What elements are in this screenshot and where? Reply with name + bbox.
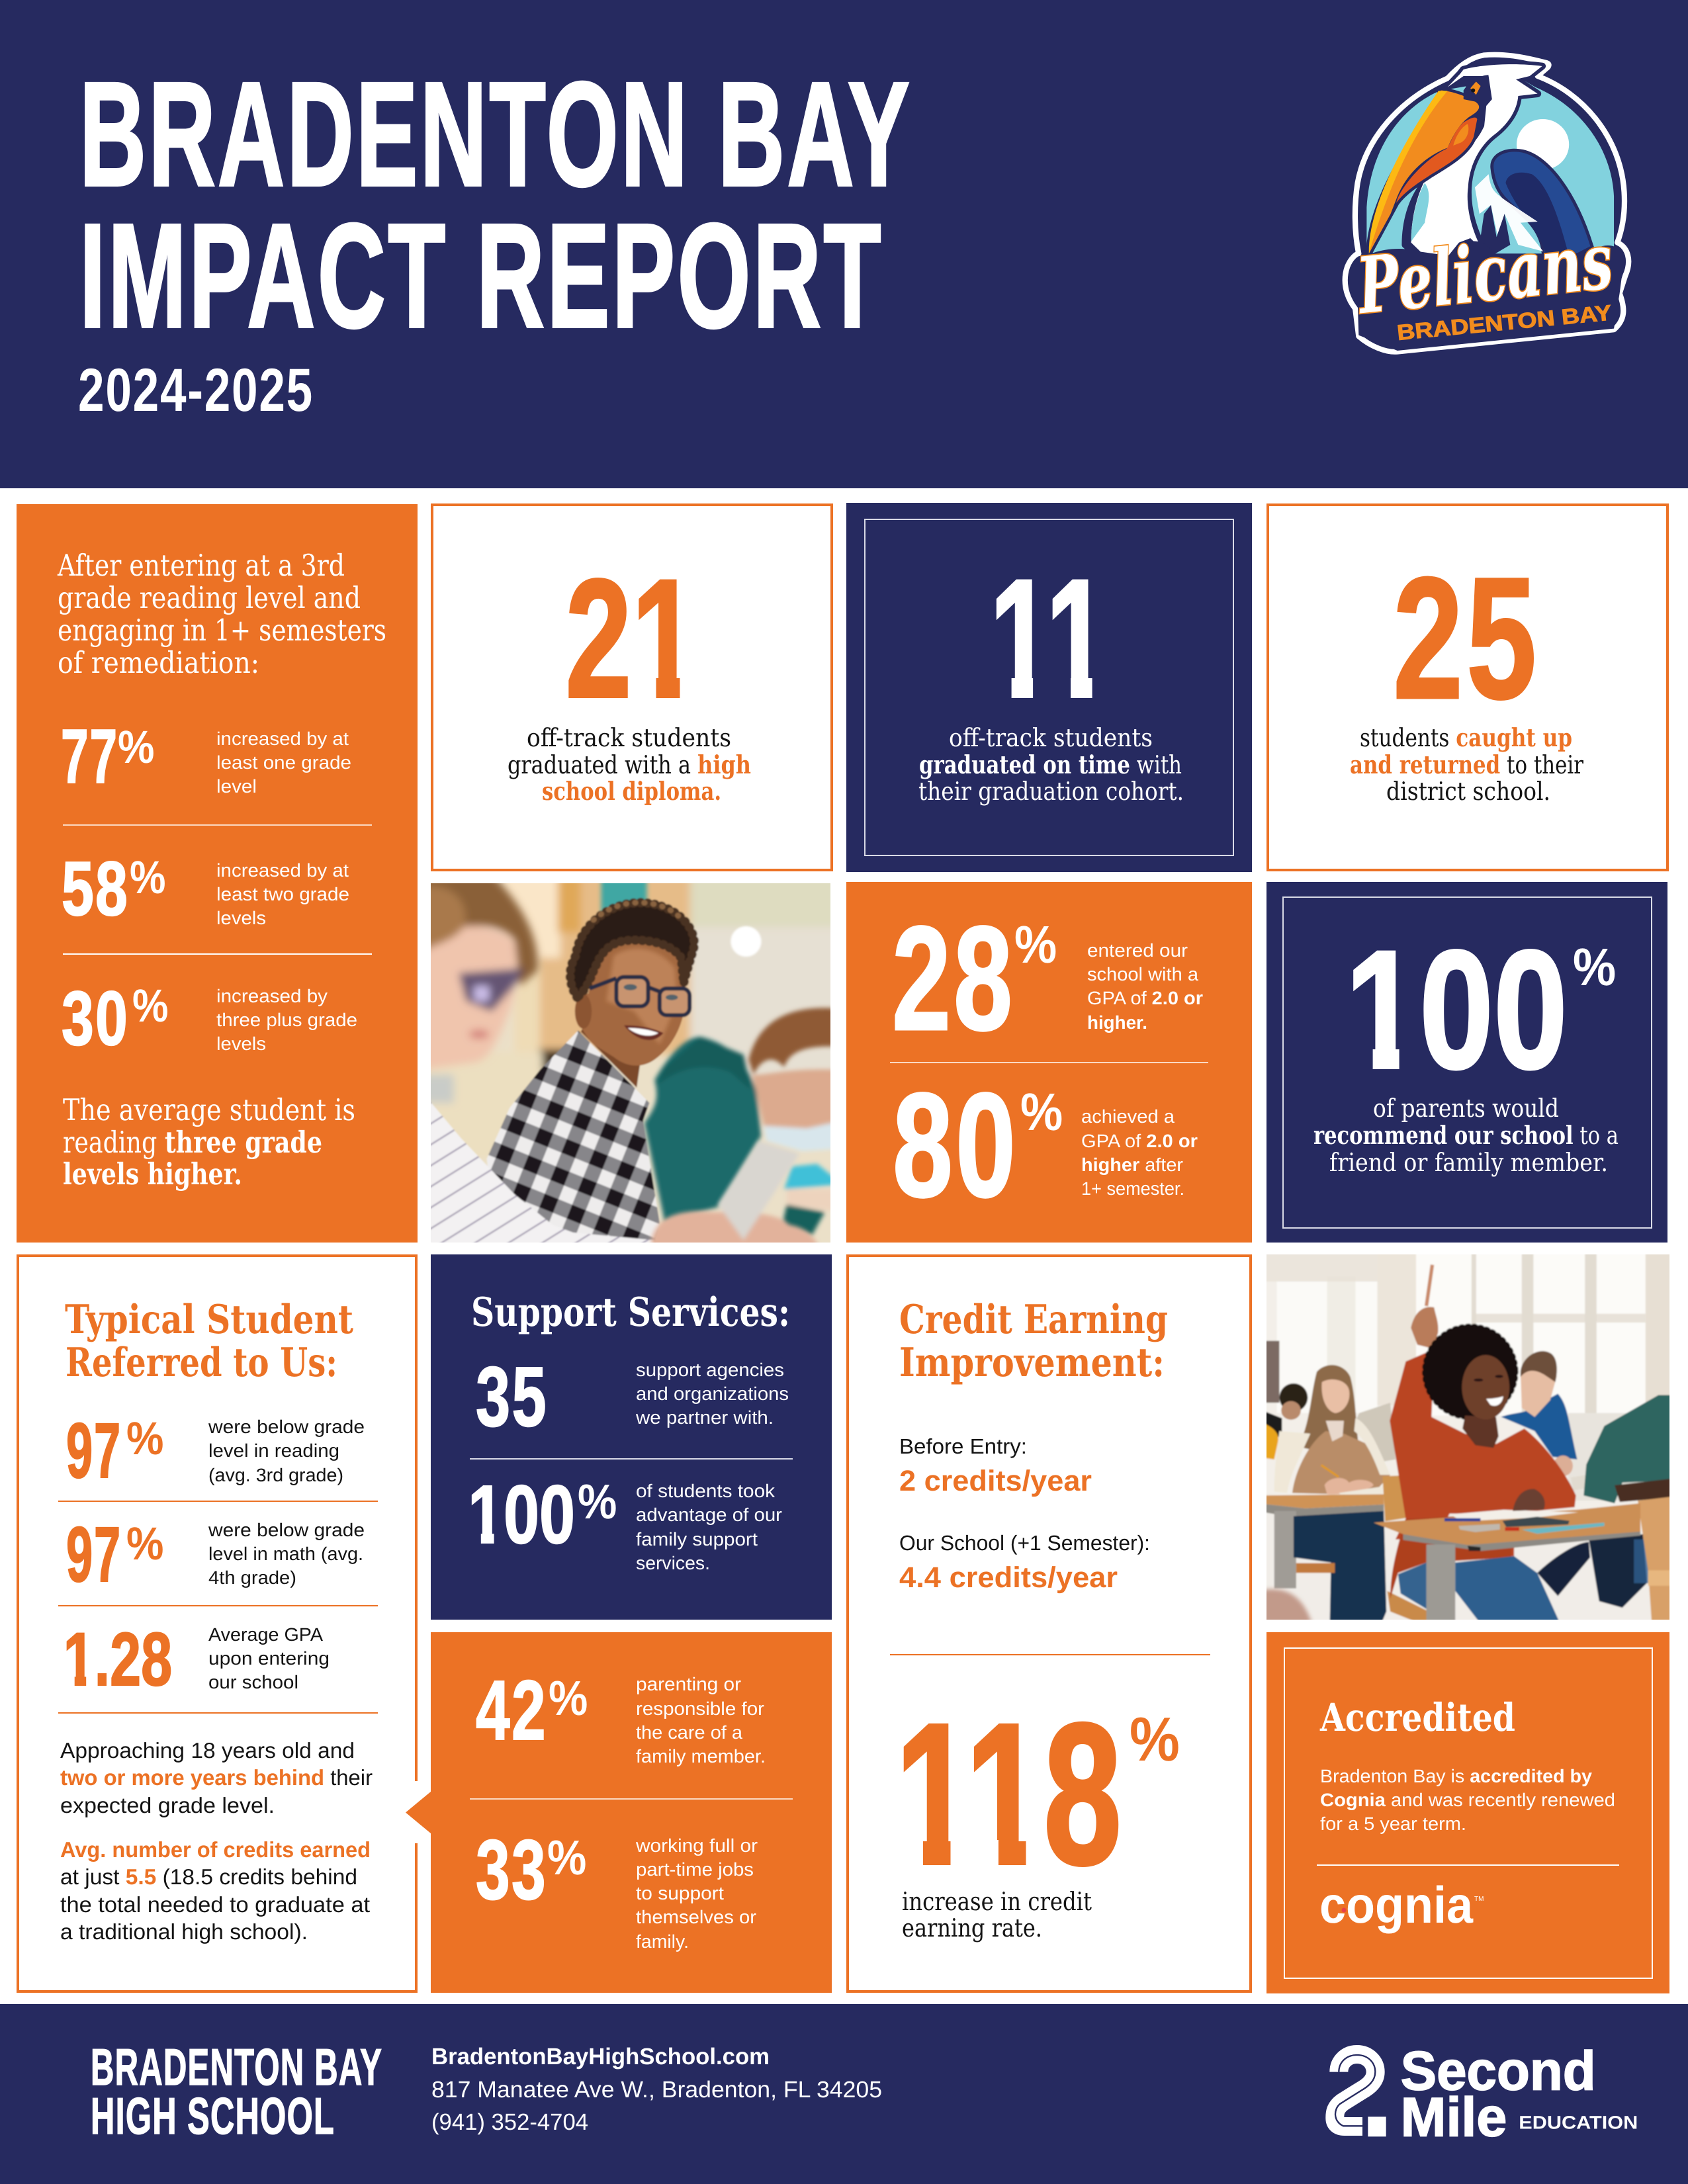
stat: 1.28 GPA: Average GPA	[208, 1624, 323, 1645]
striped shirt	[431, 1102, 655, 1243]
panel: parents recommend: of parents would	[1373, 1094, 1559, 1123]
stat: 42%: 42	[476, 1663, 547, 1758]
text block: age and grade level: expected grade level.	[60, 1793, 275, 1817]
stat: 77%: increased by at	[216, 728, 349, 749]
stat: 58%: least two grade	[216, 884, 349, 904]
before and after credits: Our School (+1 Semester):	[899, 1531, 1150, 1555]
stat: 77%	[61, 713, 351, 799]
panel: GPA stats	[846, 882, 1252, 1243]
stat: 97% reading: level in reading	[208, 1440, 339, 1461]
stat: 77%: %	[118, 721, 155, 773]
panel heading	[65, 1297, 353, 1386]
stat: 42%: the care of a	[636, 1722, 742, 1743]
stat: 97% reading	[66, 1407, 365, 1495]
panel: credit earning improvement	[848, 1256, 1251, 1991]
chair	[1382, 1475, 1407, 1522]
before and after credits	[899, 1434, 1150, 1594]
stat: 97% math: %	[126, 1518, 165, 1569]
stat: 80%	[893, 1063, 1198, 1228]
logo: Second Mile Education: Mile	[1401, 2086, 1507, 2148]
stat: 97% math: 97	[66, 1511, 122, 1598]
stat: 28%: %	[1014, 915, 1058, 974]
panel: 25 caught up: district school.	[1386, 777, 1550, 806]
background student left	[421, 874, 538, 1103]
panel heading	[57, 548, 386, 680]
stat: 42%: %	[549, 1671, 589, 1725]
stat: 100%: %	[578, 1474, 618, 1529]
footer contact details: BradentonBayHighSchool.com	[431, 2044, 770, 2070]
footer school name: BRADENTON BAY	[91, 2038, 382, 2096]
stat: 35: support agencies	[636, 1360, 784, 1380]
stat: 80%: GPA of 2.0 or	[1081, 1131, 1198, 1151]
text block: credits earned: at just 5.5 (18.5 credits behind	[60, 1864, 357, 1889]
panel: 11 graduated on time: off-track students	[949, 723, 1153, 752]
stat: 80%: achieved a	[1081, 1106, 1175, 1127]
right background student	[644, 1008, 842, 1235]
caption	[902, 1887, 1092, 1943]
stat: 28%: entered our	[1087, 940, 1188, 961]
header band	[0, 0, 1688, 488]
stat: 58%: 58	[62, 846, 129, 932]
stat: 33%	[476, 1823, 758, 1952]
panel: 25 caught up: 25	[1393, 541, 1540, 735]
text block: credits earned: Avg. number of credits earned	[60, 1837, 371, 1862]
panel heading: grade reading level and	[58, 580, 361, 615]
panel conclusion: levels higher.	[63, 1157, 242, 1192]
logo: Second Mile Education: EDUCATION	[1519, 2112, 1638, 2133]
caption: earning rate.	[902, 1913, 1042, 1943]
panel: responsibilities	[406, 1632, 832, 1993]
logo: Second Mile Education	[1335, 2040, 1638, 2148]
panel conclusion	[63, 1092, 355, 1192]
title	[79, 52, 912, 359]
panel heading: of remediation:	[58, 645, 259, 680]
plaid shirt	[487, 1030, 660, 1255]
stat: 97% reading: were below grade	[208, 1417, 365, 1437]
logo: Pelicans Bradenton Bay	[1345, 55, 1628, 352]
caption: increase in credit	[902, 1887, 1092, 1916]
panel: parents recommend: recommend our school to a	[1313, 1120, 1619, 1150]
stat: 80%: higher after	[1081, 1155, 1183, 1175]
accreditation text: Bradenton Bay is accredited by	[1320, 1766, 1592, 1786]
stat: 30%: levels	[216, 1033, 266, 1054]
text block: credits earned: the total needed to graduate at	[60, 1892, 370, 1917]
text block: credits earned: a traditional high school).	[60, 1919, 308, 1944]
panel: 25 caught up	[1268, 505, 1667, 870]
back student left	[1266, 1383, 1309, 1460]
desk items	[1444, 1489, 1605, 1534]
stat: 28%: GPA of 2.0 or	[1087, 988, 1203, 1008]
stat: 100%: of students took	[636, 1481, 776, 1501]
stat: 100%	[462, 1469, 782, 1573]
photo: student raising hand in class	[1266, 1254, 1669, 1620]
footer school name: HIGH SCHOOL	[91, 2087, 335, 2145]
text block: age and grade level: Approaching 18 years old and	[60, 1738, 355, 1763]
footer band	[0, 2004, 1688, 2184]
main student sweater	[1389, 1352, 1577, 1557]
panel: 25 caught up: students caught up	[1360, 722, 1572, 752]
stat: 33%: to support	[636, 1883, 724, 1903]
stat: 33%: themselves or	[636, 1907, 756, 1927]
stat: 42%	[476, 1663, 766, 1767]
panel heading: Credit Earning	[899, 1297, 1168, 1343]
woman left	[1274, 1365, 1390, 1497]
stat: 80%: 80	[893, 1063, 1018, 1228]
stat: 1.28 GPA: 1.28	[64, 1618, 172, 1702]
desk left	[1256, 1494, 1384, 1508]
panel heading: Typical Student	[65, 1297, 353, 1343]
stat: 1.28 GPA	[58, 1618, 330, 1702]
footer contact details: (941) 352-4704	[431, 2109, 588, 2135]
stat: 97% math	[66, 1511, 365, 1598]
stat: 80%: %	[1020, 1082, 1064, 1141]
panel: 25 caught up: and returned to their	[1350, 750, 1584, 779]
stat: 58%: %	[130, 852, 167, 903]
panel heading: Referred to Us:	[66, 1340, 337, 1386]
main student face	[1462, 1355, 1509, 1448]
stat: 42%: parenting or	[636, 1674, 741, 1694]
panel heading: After entering at a 3rd	[57, 548, 345, 583]
desk front	[1374, 1503, 1640, 1630]
title: BRADENTON BAY	[79, 52, 912, 217]
stat: 1.28 GPA: our school	[208, 1672, 298, 1692]
stat: 97% reading: %	[126, 1413, 165, 1464]
stat: 33%: working full or	[635, 1835, 758, 1856]
stat: 97% reading: 97	[66, 1407, 122, 1495]
panel: accredited	[1266, 1632, 1669, 1993]
stat: 100%: family support	[636, 1529, 758, 1550]
stat: 58%: levels	[216, 908, 266, 928]
stat: 118%: %	[1130, 1704, 1181, 1774]
panel: 11 graduated on time: their graduation cohort.	[918, 777, 1184, 806]
panel: 21 off-track students: graduated with a high	[508, 750, 751, 779]
panel heading: Accredited	[1319, 1695, 1515, 1740]
footer contact details: 817 Manatee Ave W., Bradenton, FL 34205	[431, 2077, 882, 2103]
accreditation text: Cognia and was recently renewed	[1320, 1790, 1615, 1810]
year: 2024-2025	[78, 357, 314, 424]
stat: 97% math: level in math (avg.	[208, 1544, 363, 1564]
accreditation text	[1320, 1766, 1615, 1834]
stat: 28%	[892, 896, 1203, 1061]
logo: Second Mile Education: Second	[1401, 2040, 1596, 2101]
logo: Pelicans Bradenton Bay: BRADENTON BAY	[1396, 300, 1613, 345]
panel heading: Improvement:	[899, 1340, 1165, 1386]
stat: 97% math: 4th grade)	[208, 1567, 296, 1588]
man at back right	[1501, 1351, 1587, 1491]
panel conclusion: reading three grade	[63, 1125, 322, 1160]
before and after credits: 2 credits/year	[899, 1465, 1092, 1497]
student head	[570, 902, 694, 1088]
beak	[1369, 91, 1480, 253]
panel heading	[899, 1297, 1168, 1386]
raised hand and pencil	[1411, 1265, 1439, 1348]
text block: credits earned	[60, 1837, 371, 1944]
jeans	[1398, 1563, 1427, 1609]
stat: 33%: 33	[476, 1823, 547, 1917]
panel: typical student	[18, 1256, 420, 1991]
stat: 28%: higher.	[1087, 1012, 1147, 1033]
stat: 1.28 GPA: upon entering	[208, 1648, 330, 1669]
text block: age and grade level	[60, 1738, 373, 1817]
stat: 30%	[62, 975, 357, 1061]
stat: 42%: responsible for	[636, 1698, 764, 1719]
panel: parents recommend: 100	[1345, 916, 1568, 1104]
stat: 30%: %	[132, 980, 169, 1031]
logo: cognia: TM	[1474, 1896, 1484, 1903]
stat: 80%: 1+ semester.	[1081, 1178, 1184, 1199]
stat: 30%: three plus grade	[216, 1010, 357, 1030]
panel: parents recommend: friend or family member.	[1329, 1148, 1608, 1177]
stat: 33%: %	[547, 1830, 588, 1885]
stat: 35: 35	[476, 1350, 548, 1444]
panel: parents recommend	[1266, 882, 1667, 1243]
before and after credits: 4.4 credits/year	[899, 1561, 1118, 1594]
stat: 35: we partner with.	[635, 1407, 774, 1428]
stat: 97% math: were below grade	[208, 1520, 365, 1540]
stat: 100%: services.	[636, 1553, 710, 1573]
logo: cognia: cognia	[1319, 1876, 1474, 1934]
title: IMPACT REPORT	[79, 193, 883, 359]
panel: 11 graduated on time: graduated on time with	[919, 750, 1182, 779]
stat: 35	[476, 1350, 789, 1444]
stat: 118%: 118	[895, 1682, 1122, 1907]
stat: 100%: advantage of our	[636, 1505, 782, 1525]
stat: 97% reading: (avg. 3rd grade)	[208, 1465, 343, 1485]
panel conclusion: The average student is	[63, 1092, 355, 1127]
panel: support services	[431, 1254, 832, 1620]
accreditation text: for a 5 year term.	[1320, 1813, 1466, 1834]
stat: 77%: least one grade	[216, 752, 351, 773]
stat: 58%: increased by at	[216, 860, 349, 881]
panel: reading growth	[17, 504, 418, 1243]
before and after credits: Before Entry:	[899, 1434, 1027, 1458]
panel: 21 off-track students: 21	[565, 545, 697, 733]
stat: 28%: 28	[892, 896, 1015, 1061]
main student hair	[1427, 1328, 1514, 1416]
footer contact details	[431, 2044, 882, 2135]
panel heading: engaging in 1+ semesters	[58, 613, 386, 648]
panel: 21 off-track students	[432, 505, 832, 870]
stat: 77%: 77	[61, 713, 118, 799]
hand and tablet	[649, 1141, 820, 1255]
panel heading: Support Services:	[471, 1289, 790, 1336]
stat: 30%: 30	[62, 975, 129, 1061]
stat: 35: and organizations	[636, 1383, 789, 1404]
panel: 21 off-track students: off-track students	[527, 723, 731, 752]
stat: 77%: level	[216, 776, 257, 797]
stat: 100%: 100	[468, 1469, 575, 1561]
panel: 11 graduated on time: 11	[990, 545, 1108, 733]
stat: 30%: increased by	[216, 986, 328, 1006]
stat: 58%	[62, 846, 349, 932]
footer school name	[91, 2038, 382, 2145]
panel: 11 graduated on time	[846, 503, 1252, 872]
photo: smiling student in plaid shirt	[431, 883, 830, 1243]
stat: 33%: part-time jobs	[636, 1859, 754, 1880]
panel: 21 off-track students: school diploma.	[542, 776, 721, 806]
man at right	[1536, 1394, 1669, 1620]
text block: age and grade level: two or more years behind their	[60, 1765, 373, 1790]
stat: 42%: family member.	[636, 1746, 766, 1767]
panel: parents recommend: %	[1573, 938, 1617, 996]
stat: 33%: family.	[636, 1931, 689, 1952]
stat: 28%: school with a	[1087, 964, 1198, 984]
